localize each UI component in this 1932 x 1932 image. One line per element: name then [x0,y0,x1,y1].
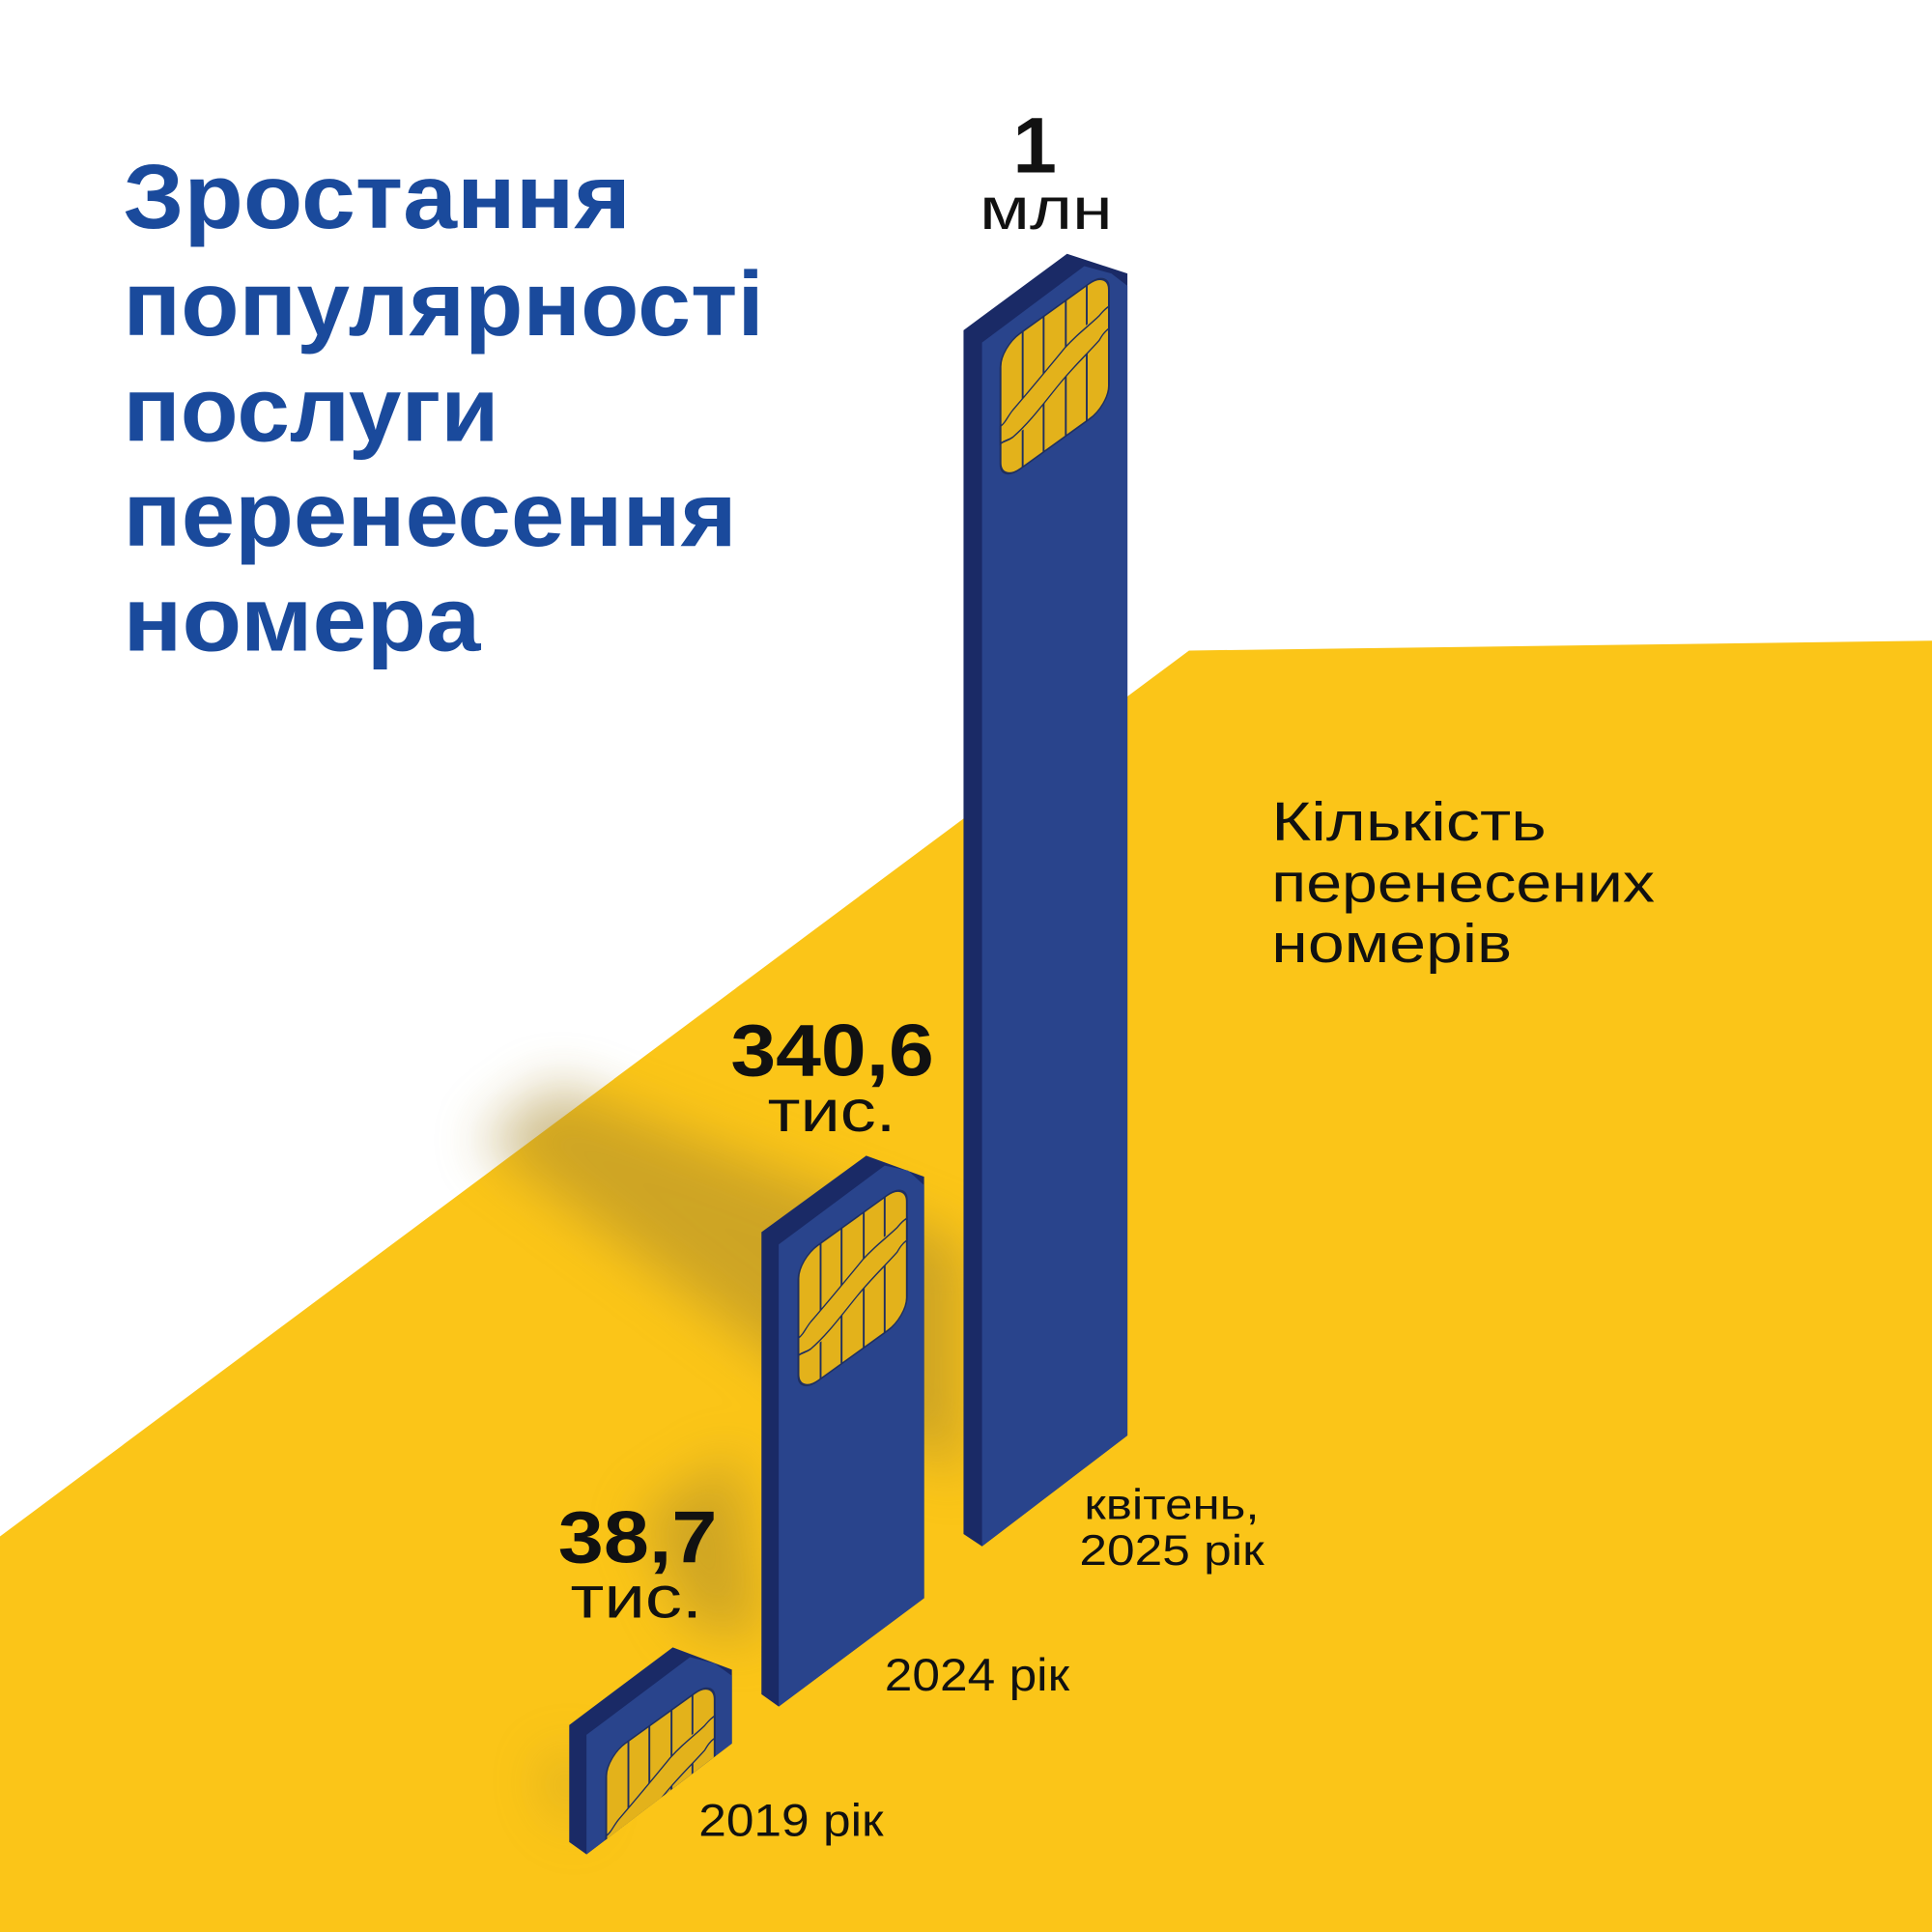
year label: 2025: 2025 рік [1079,1527,1264,1575]
title: перенесення [124,465,737,566]
bar shadows [480,1084,963,1836]
value label: 340,6 [730,1010,934,1144]
legend text: Кількість [1271,791,1547,852]
year label: 2019: 2019 рік [698,1796,884,1847]
year label: 2025 [1079,1482,1264,1575]
bar: 2025 (1 mln) [963,254,1127,1547]
year label: 2025: квітень, [1084,1482,1260,1529]
title: послуги [124,360,499,462]
bar: 2024 [761,1155,924,1707]
value label: 38,7: тис. [571,1565,702,1631]
bar: 2019 [569,1647,732,1855]
value label: 340,6: 340,6 [730,1010,934,1093]
legend text [1271,791,1655,974]
legend text: номерів [1271,913,1512,974]
value label: 340,6: тис. [768,1078,895,1144]
year label: 2024: 2024 рік [885,1650,1070,1701]
title: Зростання [124,147,631,248]
title: номера [124,569,482,670]
value label: 1 mln [980,102,1113,242]
value label: 38,7: 38,7 [558,1496,717,1578]
title: популярності [124,254,764,355]
legend text: перенесених [1271,853,1655,914]
background yellow area [0,640,1932,1932]
value label: 1 mln: млн [980,176,1113,242]
value label: 38,7 [558,1496,717,1631]
value label: 1 mln: 1 [1012,102,1057,190]
title [124,147,764,670]
